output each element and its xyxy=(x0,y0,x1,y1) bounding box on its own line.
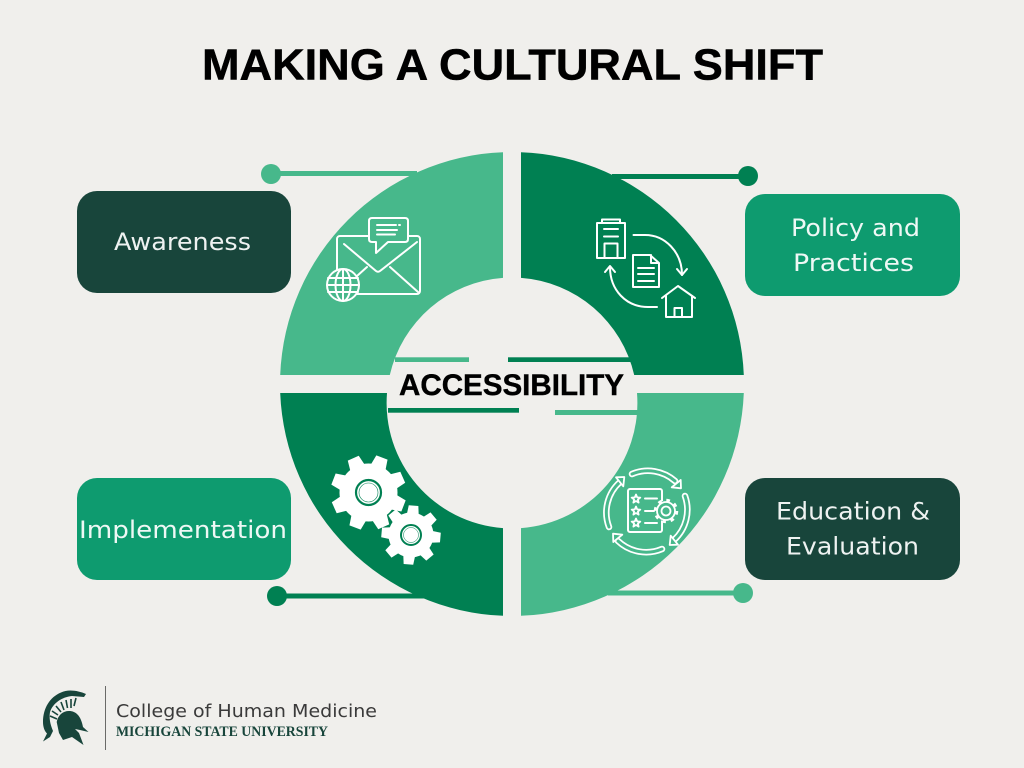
logo: Michigan State University College of Human Medicine xyxy=(43,686,377,750)
label: policy and practices: Practices xyxy=(793,249,914,277)
label: awareness: Awareness xyxy=(114,228,251,256)
panel: awareness xyxy=(77,152,503,375)
title: MAKING A CULTURAL SHIFT xyxy=(202,40,823,90)
label box: education xyxy=(745,478,960,580)
panel: policy and practices xyxy=(521,152,960,375)
divider xyxy=(105,686,106,750)
ring segment: top right xyxy=(521,152,744,375)
label: education and evaluation: Evaluation xyxy=(786,532,919,560)
center heading: accessibility xyxy=(388,357,638,415)
label: policy and practices xyxy=(791,214,920,277)
label: education and evaluation: Education & xyxy=(776,498,930,526)
connector: education xyxy=(608,583,753,603)
ring segment: bottom right xyxy=(521,393,744,616)
icon: envelope with speech bubble and globe xyxy=(327,218,420,301)
connector: awareness xyxy=(261,164,417,184)
icon: checklist with gear and cycle arrows xyxy=(606,471,687,552)
label: education and evaluation xyxy=(776,498,930,560)
center heading: accessibility: ACCESSIBILITY xyxy=(399,369,624,402)
icon: building, document and house cycle xyxy=(597,220,695,317)
label box: awareness xyxy=(77,191,291,293)
panel: implementation xyxy=(77,393,503,616)
text: college of human medicine: College of Human Medicine xyxy=(116,701,377,722)
label box: policy xyxy=(745,194,960,296)
label: implementation: Implementation xyxy=(79,516,287,544)
icon: spartan helmet xyxy=(43,691,88,745)
label: policy and practices: Policy and xyxy=(791,214,920,242)
connector: implementation xyxy=(267,586,427,606)
icon: gears xyxy=(331,455,441,565)
ring segment: bottom left xyxy=(280,393,503,616)
label box: implementation xyxy=(77,478,291,580)
connector: policy xyxy=(612,166,758,186)
panel: education and evaluation xyxy=(521,393,960,616)
text: michigan state university: MICHIGAN STATE UNIVERSITY xyxy=(116,724,328,740)
ring segment: top left xyxy=(280,152,503,375)
